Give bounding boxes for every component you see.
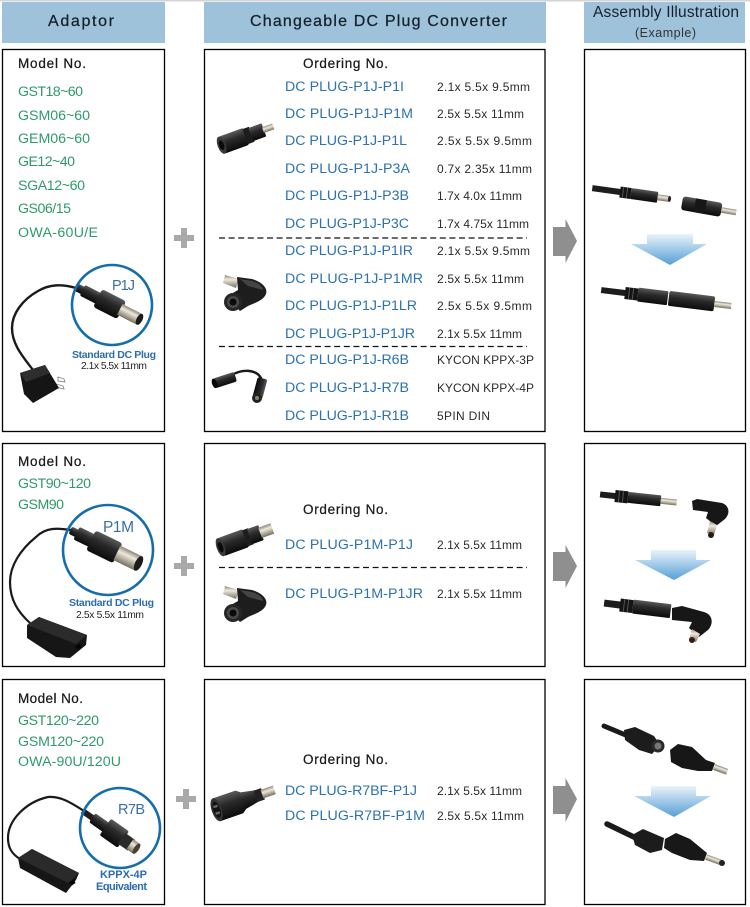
callout: P1M circle: Standard DC Plug: [69, 597, 154, 609]
callout: P1M circle: [63, 505, 154, 621]
icon: desktop adaptor with cable: [10, 529, 87, 658]
heading: ordering no: Ordering No.: [303, 502, 388, 517]
ordering list: 2.1x 5.5x 11mm: [437, 538, 522, 552]
ordering list: right angle: 2.5x 5.5x 9.5mm: [437, 299, 532, 313]
header: Adaptor: Adaptor: [48, 13, 115, 30]
panel: row 1 converter: [204, 50, 545, 432]
ordering list: straight: DC PLUG-P1J-P1L: [285, 133, 407, 149]
model list: [18, 713, 121, 770]
panel: row 2 converter: [204, 444, 545, 666]
callout: R7B circle: Equivalent: [96, 881, 147, 893]
header: Assembly Illustration: Assembly Illustration: [593, 4, 739, 21]
ordering list: 2.1x 5.5x 11mm: [437, 784, 522, 798]
callout: P1J circle: P1J: [112, 278, 135, 294]
icon: straight converter: [214, 519, 276, 558]
callout: P1J circle: Standard DC Plug: [72, 349, 156, 361]
ordering list: DC PLUG-R7BF-P1J: [285, 783, 417, 799]
ordering list: [285, 783, 524, 824]
ordering list: DC PLUG-R7BF-P1M: [285, 808, 425, 824]
panel: row 3 adaptor: [2, 680, 164, 904]
ordering list: straight: 0.7x 2.35x 11mm: [437, 162, 532, 176]
heading: ordering no: Ordering No.: [303, 56, 388, 71]
ordering list: straight: DC PLUG-P1J-P1I: [285, 79, 404, 95]
ordering list: cable connectors: [285, 352, 534, 424]
ordering list: right angle: DC PLUG-P1J-P1IR: [285, 243, 413, 259]
icon: right-angle converter: [223, 275, 266, 311]
ordering list: straight: 1.7x 4.0x 11mm: [437, 189, 522, 203]
ordering list: right angle: [285, 243, 532, 342]
icon: desktop adaptor with cable: [8, 797, 84, 893]
header: Assembly Illustration: [584, 2, 745, 43]
model list: [18, 84, 98, 241]
header: Changeable DC Plug Converter: [204, 2, 546, 43]
arrow: row 2 gray: [553, 545, 577, 588]
ordering list: right angle: 2.1x 5.5x 9.5mm: [437, 244, 530, 258]
arrow: row 3 gray: [553, 778, 577, 822]
model list: GEM06~60: [18, 131, 90, 147]
icon: assembled R7B plug: [607, 824, 725, 866]
icon: plus row 2: [174, 556, 194, 576]
ordering list: right angle: 2.1x 5.5x 11mm: [437, 327, 522, 341]
model list: GSM90: [18, 497, 64, 513]
model list: SGA12~60: [18, 178, 85, 194]
model list: OWA-60U/E: [18, 225, 98, 241]
ordering list: straight: 2.1x 5.5x 9.5mm: [437, 80, 530, 94]
ordering list: cable connectors: KYCON KPPX-4P: [437, 381, 534, 395]
arrow: row 1 gray: [553, 219, 577, 263]
ordering list: straight: DC PLUG-P1J-P3B: [285, 188, 409, 204]
heading: model no: Model No.: [18, 691, 83, 706]
icon: blue down arrow: [631, 234, 707, 265]
ordering list: cable connectors: DC PLUG-P1J-R1B: [285, 408, 409, 424]
ordering list: [285, 537, 522, 602]
model list: GST90~120: [18, 476, 91, 492]
icon: R7B plug and converter: [604, 726, 728, 775]
icon: plus row 3: [176, 789, 196, 809]
icon: wall adaptor with cable: [12, 285, 76, 403]
heading: model no: Model No.: [18, 454, 86, 469]
ordering list: straight: DC PLUG-P1J-P3A: [285, 161, 411, 177]
header: Assembly Illustration: (Example): [635, 26, 696, 40]
panel: row 1 assembly: [584, 50, 746, 432]
ordering list: cable connectors: DC PLUG-P1J-R7B: [285, 380, 409, 396]
ordering list: DC PLUG-P1M-P1JR: [285, 586, 423, 602]
header: Changeable DC Plug Converter: Changeable DC Plug Converter: [250, 13, 508, 30]
header: Adaptor: [2, 2, 165, 43]
ordering list: straight: DC PLUG-P1J-P1M: [285, 106, 413, 122]
model list: OWA-90U/120U: [18, 754, 121, 770]
heading: ordering no: Ordering No.: [303, 752, 388, 767]
ordering list: cable connectors: DC PLUG-P1J-R6B: [285, 352, 409, 368]
model list: GE12~40: [18, 154, 75, 170]
callout: P1J circle: 2.1x 5.5x 11mm: [81, 361, 147, 372]
icon: R7BF converter: [208, 779, 278, 823]
icon: assembled plug: [600, 283, 732, 313]
callout: R7B circle: [77, 788, 160, 893]
ordering list: right angle: DC PLUG-P1J-P1MR: [285, 271, 423, 287]
model list: GST120~220: [18, 713, 99, 729]
model list: GSM06~60: [18, 108, 90, 124]
icon: plug and right-angle converter: [599, 488, 728, 538]
ordering list: straight: 1.7x 4.75x 11mm: [437, 217, 529, 231]
ordering list: 2.5x 5.5x 11mm: [437, 809, 524, 823]
model list: GS06/15: [18, 201, 71, 217]
icon: plus row 1: [174, 228, 194, 248]
ordering list: straight: 2.5x 5.5x 11mm: [437, 107, 524, 121]
ordering list: cable connectors: 5PIN DIN: [437, 409, 490, 423]
ordering list: cable connectors: KYCON KPPX-3P: [437, 353, 534, 367]
callout: P1M circle: P1M: [103, 519, 134, 536]
icon: right-angle converter: [223, 586, 266, 622]
callout: R7B circle: KPPX-4P: [100, 869, 147, 881]
icon: cable converter: [211, 371, 267, 403]
panel: row 3 assembly: [584, 680, 746, 904]
icon: straight converter: [215, 118, 276, 155]
ordering list: right angle: 2.5x 5.5x 11mm: [437, 272, 524, 286]
ordering list: right angle: DC PLUG-P1J-P1LR: [285, 298, 417, 314]
ordering list: 2.1x 5.5x 11mm: [437, 587, 522, 601]
callout: R7B circle: R7B: [118, 802, 145, 818]
heading: model no: Model No.: [18, 56, 86, 71]
model list: GSM120~220: [18, 734, 104, 750]
ordering list: DC PLUG-P1M-P1J: [285, 537, 413, 553]
panel: row 3 converter: [204, 680, 545, 904]
ordering list: straight: DC PLUG-P1J-P3C: [285, 216, 409, 232]
callout: P1J circle: [72, 265, 156, 372]
ordering list: right angle: DC PLUG-P1J-P1JR: [285, 326, 415, 342]
model list: [18, 476, 91, 513]
panel: row 1 adaptor: [2, 50, 164, 432]
ordering list: straight: 2.5x 5.5x 9.5mm: [437, 134, 532, 148]
model list: GST18~60: [18, 84, 83, 100]
panel: row 2 assembly: [584, 444, 746, 666]
icon: assembled right-angle plug: [603, 596, 712, 643]
callout: P1M circle: 2.5x 5.5x 11mm: [76, 610, 144, 621]
icon: blue down arrow: [635, 550, 711, 580]
icon: plug and converter before assembly: [592, 183, 737, 219]
ordering list: straight: [285, 79, 532, 232]
panel: row 2 adaptor: [2, 444, 164, 666]
icon: blue down arrow: [634, 786, 711, 817]
